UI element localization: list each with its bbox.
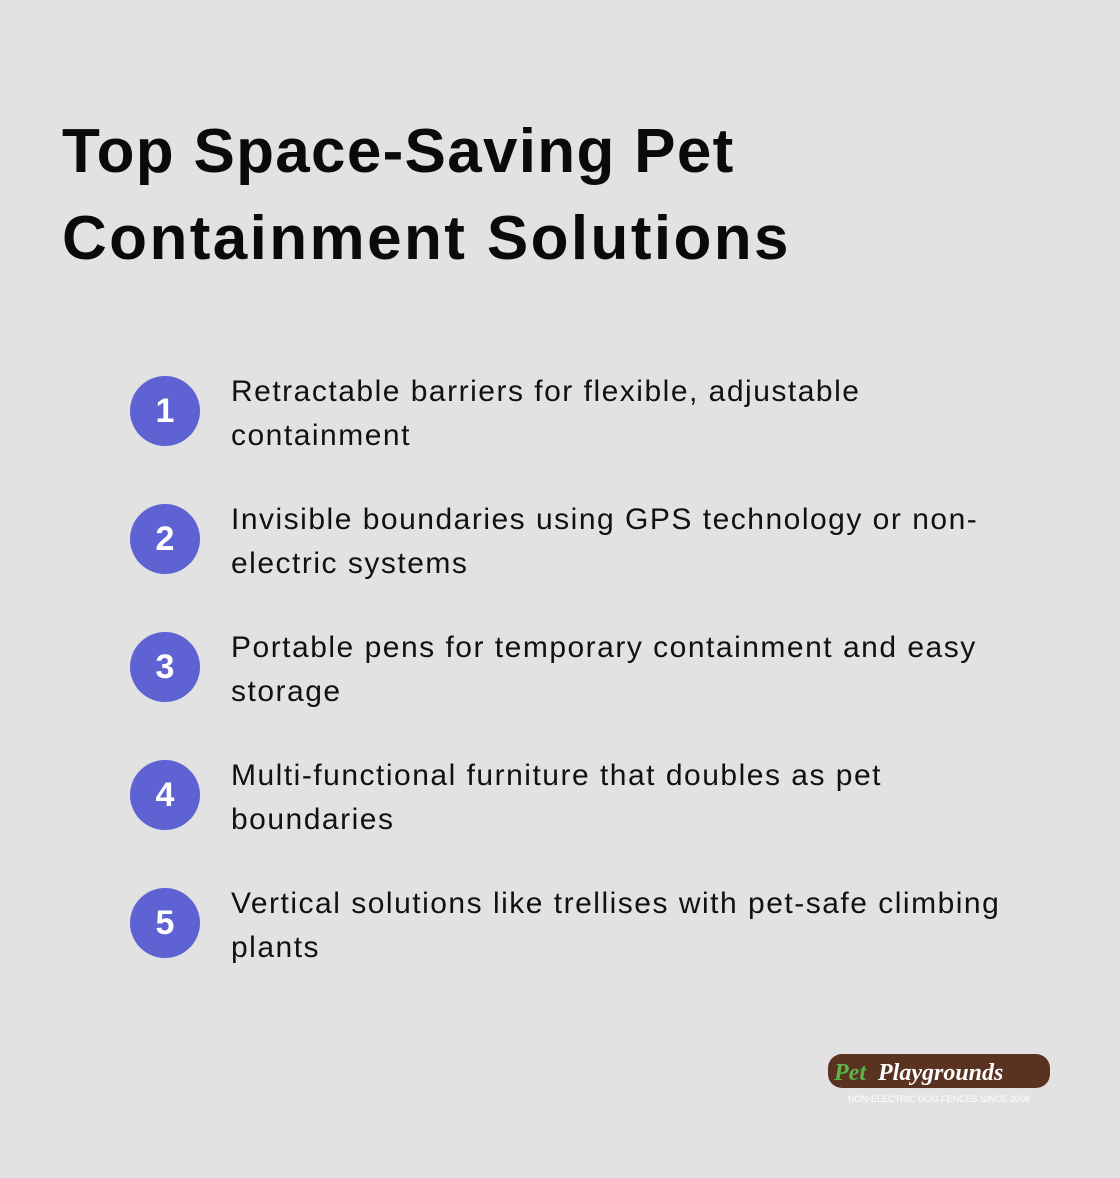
logo: NON-ELECTRIC DOG FENCES SINCE 2008 — [848, 1094, 1030, 1104]
title: Top Space-Saving Pet — [62, 117, 735, 186]
item 2: 2 — [156, 520, 174, 558]
item 3: Portable pens for temporary containment and easy — [231, 631, 977, 664]
logo: Pet — [833, 1060, 867, 1086]
item 3: 3 — [156, 648, 174, 686]
item 5: plants — [231, 931, 320, 964]
logo — [828, 1054, 1050, 1104]
item 3 — [130, 631, 977, 708]
item 2: electric systems — [231, 547, 468, 580]
item 1: 1 — [156, 392, 174, 430]
item 1: containment — [231, 419, 411, 452]
item 2 — [130, 503, 978, 580]
item 1 — [130, 375, 860, 452]
item 4: Multi-functional furniture that doubles as pet — [231, 759, 882, 792]
item 2: Invisible boundaries using GPS technology or non- — [231, 503, 978, 536]
title — [62, 117, 791, 273]
item 4: 4 — [156, 776, 174, 814]
item 3: storage — [231, 675, 342, 708]
item 5 — [130, 887, 1000, 964]
item 4: boundaries — [231, 803, 394, 836]
item 5: 5 — [156, 904, 174, 942]
title: Containment Solutions — [62, 204, 791, 273]
item 1: Retractable barriers for flexible, adjustable — [231, 375, 860, 408]
item 4 — [130, 759, 882, 836]
item 5: Vertical solutions like trellises with pet-safe climbing — [231, 887, 1000, 920]
logo: Playgrounds — [877, 1060, 1003, 1086]
